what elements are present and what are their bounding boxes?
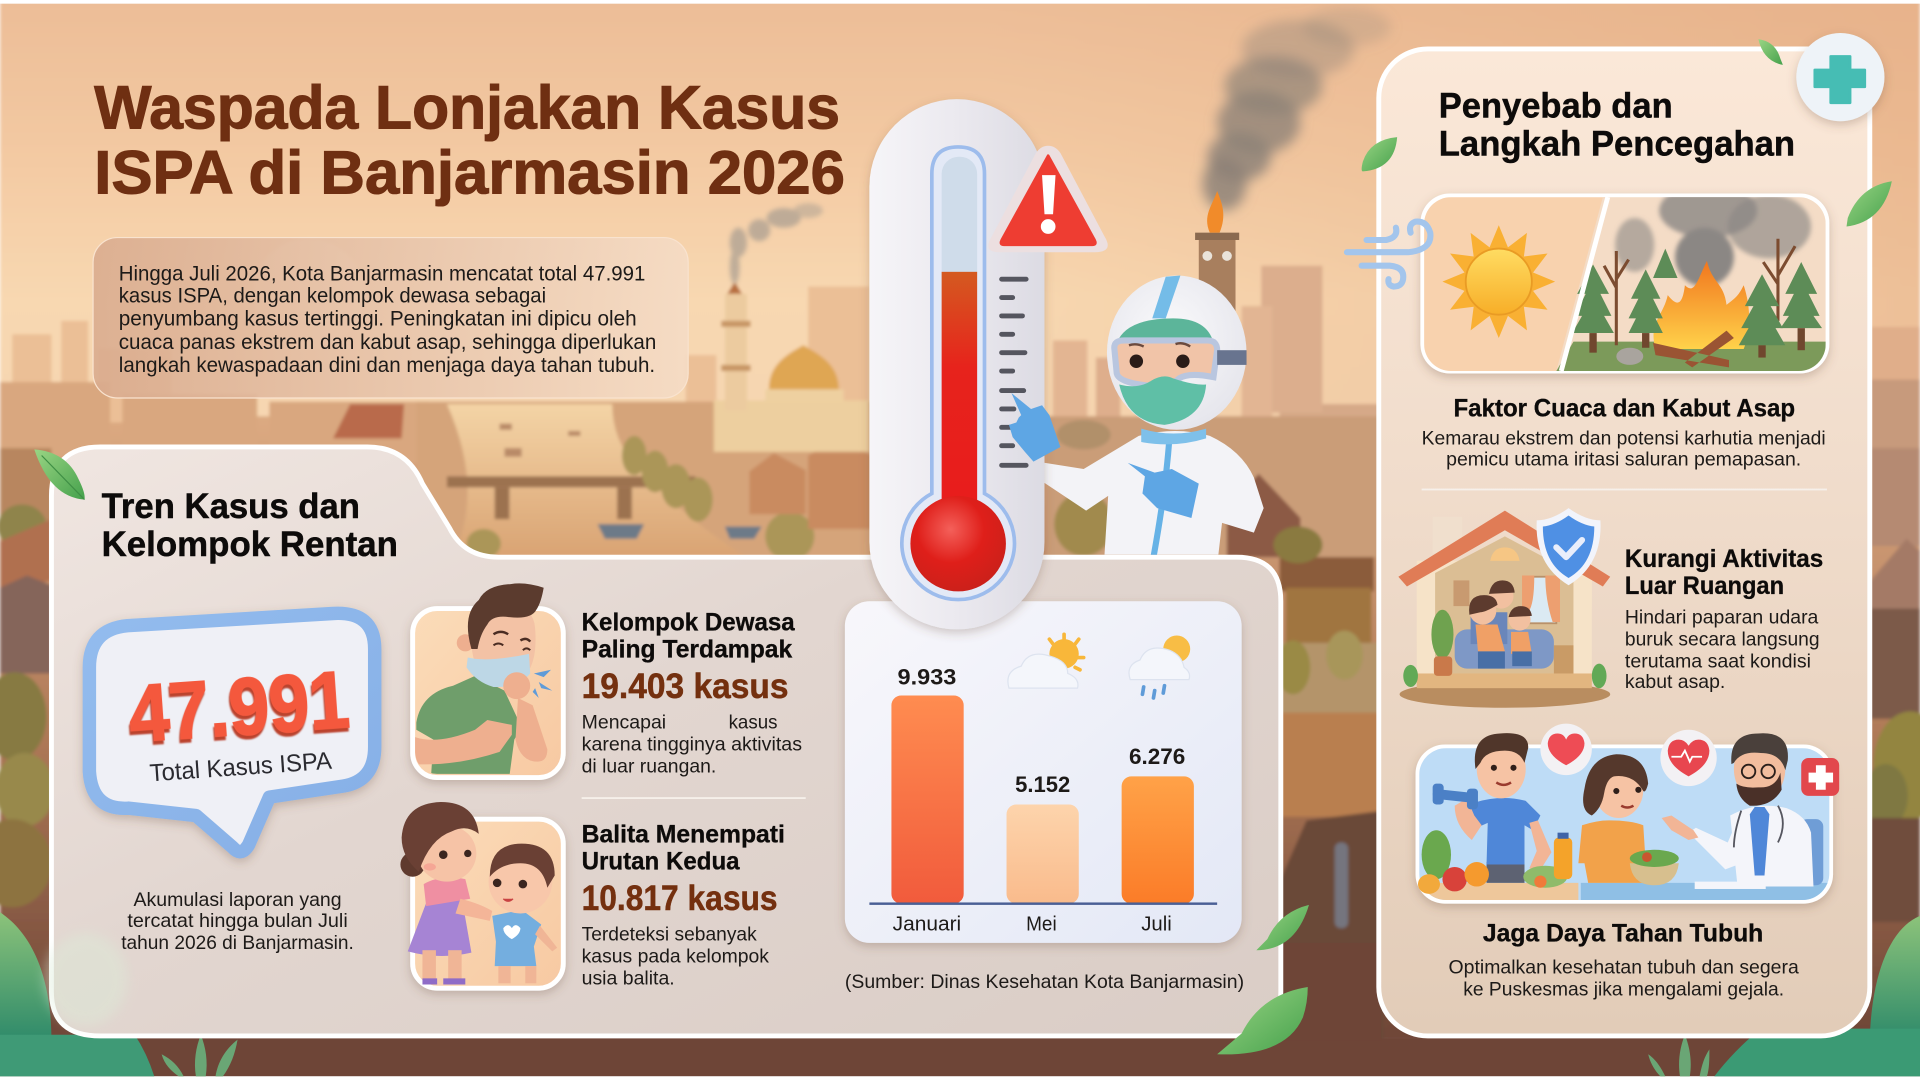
- smoke: [1615, 184, 1811, 287]
- title: Waspada Lonjakan Kasus: [94, 74, 840, 142]
- thermometer: [869, 99, 1044, 629]
- text: balita: kasus pada kelompok: [582, 946, 769, 967]
- icon: leaf right panel right edge: [1847, 181, 1892, 227]
- icon: leaf bottom center: [1217, 987, 1308, 1054]
- text: jaga daya: [1449, 920, 1799, 1001]
- text: dewasa: di luar ruangan.: [582, 757, 716, 778]
- small boats: [500, 424, 580, 457]
- text: kurangi aktivitas: [1625, 545, 1823, 693]
- thermometer ticks: [999, 277, 1029, 468]
- heading: penyebab: Penyebab dan: [1439, 86, 1673, 126]
- bar labels: Juli: [1141, 914, 1172, 936]
- text: faktor cuaca: [1422, 394, 1826, 470]
- icon: house with family: [1398, 508, 1610, 708]
- hood: [1107, 276, 1247, 430]
- callout: total kasus: 47.991: [126, 655, 352, 760]
- icon: leaf right panel left edge: [1362, 137, 1397, 171]
- bar values: 9.933: [898, 664, 956, 689]
- stack flame: [1207, 191, 1223, 233]
- icon: plus badge: [1796, 33, 1884, 121]
- intro paragraph: penyumbang kasus tertinggi. Peningkatan ini dipicu oleh: [119, 308, 637, 331]
- icon: sun cloud: [1008, 634, 1084, 688]
- title: [94, 74, 845, 206]
- frame strips: [0, 0, 1920, 4]
- left edge houses and trees: [0, 448, 54, 907]
- icon: red cross badge: [1801, 758, 1839, 796]
- icon: plant cluster bottom right: [1648, 916, 1920, 1076]
- text: jaga daya: Optimalkan kesehatan tubuh dan segera: [1449, 957, 1799, 978]
- mask: [1119, 376, 1206, 425]
- text: faktor cuaca: Kemarau ekstrem dan potensi karhutia menjadi: [1422, 428, 1826, 449]
- minaret smoke: [730, 203, 823, 284]
- text: dewasa: [582, 609, 802, 778]
- text: akumulasi: tahun 2026 di Banjarmasin.: [121, 933, 354, 954]
- bar: januari: [891, 696, 964, 904]
- boats: [598, 524, 762, 539]
- near city blocks: [0, 382, 429, 463]
- icon: warning triangle: [988, 146, 1108, 252]
- soft green glow: [44, 933, 127, 1026]
- doctor gloves: [1009, 393, 1199, 518]
- text: akumulasi: [121, 890, 354, 954]
- text: kurangi aktivitas: Luar Ruangan: [1625, 572, 1784, 600]
- fire: [1653, 261, 1749, 349]
- smoke stack: [1195, 233, 1239, 311]
- doctor: [1662, 733, 1813, 889]
- intro paragraph: Hingga Juli 2026, Kota Banjarmasin mencatat total 47.991: [119, 262, 645, 285]
- text: faktor cuaca: pemicu utama iritasi saluran pemapasan.: [1446, 449, 1801, 470]
- bridge: [447, 476, 696, 519]
- land around the river: [416, 402, 882, 561]
- red roof house: [333, 404, 404, 438]
- intro paragraph: [119, 262, 656, 377]
- text: jaga daya: ke Puskesmas jika mengalami gejala.: [1463, 980, 1784, 1001]
- callout: total kasus: [89, 613, 375, 852]
- text: kurangi aktivitas: kabut asap.: [1625, 672, 1725, 693]
- bar: mei: [1007, 804, 1079, 904]
- coughing man head: [457, 583, 552, 699]
- card: healthy habits: [1416, 724, 1839, 904]
- man with dumbbell: [1432, 733, 1551, 883]
- card: sun and forest fire: [1420, 184, 1829, 373]
- icon: leaf chart bottom: [1256, 905, 1309, 950]
- text: kurangi aktivitas: Kurangi Aktivitas: [1625, 545, 1823, 573]
- card: children: [400, 802, 563, 988]
- text: dewasa: 19.403 kasus: [582, 666, 789, 706]
- buildings between panels: [1276, 404, 1384, 1043]
- icon: rain cloud: [1129, 636, 1190, 698]
- girl: [400, 802, 479, 984]
- text: dewasa: Paling Terdampak: [582, 636, 792, 664]
- thermometer fluid: [942, 272, 977, 511]
- icon: leaf top left of panel: [34, 449, 85, 500]
- riverside trees and houses: [420, 436, 814, 561]
- icon: shield: [1537, 508, 1601, 585]
- bar labels: Mei: [1026, 914, 1057, 936]
- intro paragraph: cuaca panas ekstrem dan kabut asap, sehingga diperlukan: [119, 331, 656, 354]
- intro paragraph: langkah kewaspadaan dini dan menjaga daya tahan tubuh.: [119, 354, 655, 377]
- text: kurangi aktivitas: Hindari paparan udara: [1625, 607, 1819, 628]
- bar chart: [845, 601, 1242, 943]
- bar values: 6.276: [1129, 744, 1185, 769]
- heading: penyebab: [1439, 86, 1795, 164]
- bar values: 5.152: [1015, 772, 1070, 797]
- panel: intro: [93, 238, 688, 398]
- text: balita: 10.817 kasus: [582, 878, 778, 918]
- river: [447, 404, 747, 557]
- text: dewasa: Kelompok Dewasa: [582, 609, 796, 637]
- title: ISPA di Banjarmasin 2026: [94, 138, 845, 206]
- heading: tren kasus: Kelompok Rentan: [102, 524, 398, 564]
- heading: tren kasus: Tren Kasus dan: [102, 486, 360, 526]
- boy: [456, 844, 557, 983]
- text: jaga daya: Jaga Daya Tahan Tubuh: [1483, 920, 1763, 948]
- vegetables: [1418, 830, 1572, 894]
- intro paragraph: kasus ISPA, dengan kelompok dewasa sebagai: [119, 284, 546, 307]
- source note: (Sumber: Dinas Kesehatan Kota Banjarmasin): [845, 972, 1244, 993]
- icon: plant cluster bottom left: [0, 912, 238, 1076]
- right city backdrop: [1047, 266, 1380, 563]
- text: dewasa: karena tingginya aktivitas: [582, 735, 802, 756]
- text: akumulasi: tercatat hingga bulan Juli: [127, 911, 348, 932]
- suit body: [1035, 431, 1264, 555]
- bar labels: [893, 914, 1172, 936]
- text: faktor cuaca: Faktor Cuaca dan Kabut Asap: [1453, 394, 1795, 422]
- callout: total kasus: Total Kasus ISPA: [149, 748, 333, 787]
- woman with salad: [1578, 754, 1679, 885]
- doctor character: [1035, 276, 1264, 557]
- left skyline: [12, 287, 869, 429]
- text: balita: Urutan Kedua: [582, 847, 741, 875]
- text: kurangi aktivitas: terutama saat kondisi: [1625, 651, 1811, 672]
- bar labels: Januari: [893, 914, 961, 936]
- icon: leaf top of right panel: [1758, 39, 1783, 65]
- icon: sun: [1442, 225, 1555, 338]
- text: kurangi aktivitas: buruk secara langsung: [1625, 629, 1820, 650]
- text: dewasa: kasus: [729, 713, 778, 734]
- mosque: [714, 282, 869, 452]
- card: adult coughing: [409, 583, 563, 778]
- trees: [1572, 249, 1822, 345]
- goggles and face: [1114, 340, 1217, 386]
- text: akumulasi: Akumulasi laporan yang: [133, 890, 342, 911]
- right edge buildings: [1864, 327, 1920, 922]
- text: balita: Balita Menempati: [582, 820, 785, 848]
- text: balita: usia balita.: [582, 968, 675, 989]
- panel: tren kasus: [44, 447, 1281, 1036]
- bare trees: [1604, 239, 1795, 345]
- heading: tren kasus: [102, 486, 398, 564]
- bar values: [898, 664, 1185, 797]
- bottom band: [0, 1038, 1920, 1076]
- icon: heartbeat bubble: [1660, 730, 1717, 786]
- heading: penyebab: Langkah Pencegahan: [1439, 124, 1795, 164]
- text: balita: Terdeteksi sebanyak: [582, 924, 757, 945]
- big smoke plume: [1202, 7, 1391, 211]
- icon: heart bubble: [1540, 724, 1592, 775]
- icon: wind: [1347, 222, 1430, 287]
- thermometer tube: [902, 147, 1014, 600]
- bar: juli: [1122, 776, 1194, 904]
- panel: penyebab dan pencegahan: [1379, 49, 1870, 1036]
- text: balita: [582, 820, 785, 989]
- text: dewasa: Mencapai: [582, 713, 666, 734]
